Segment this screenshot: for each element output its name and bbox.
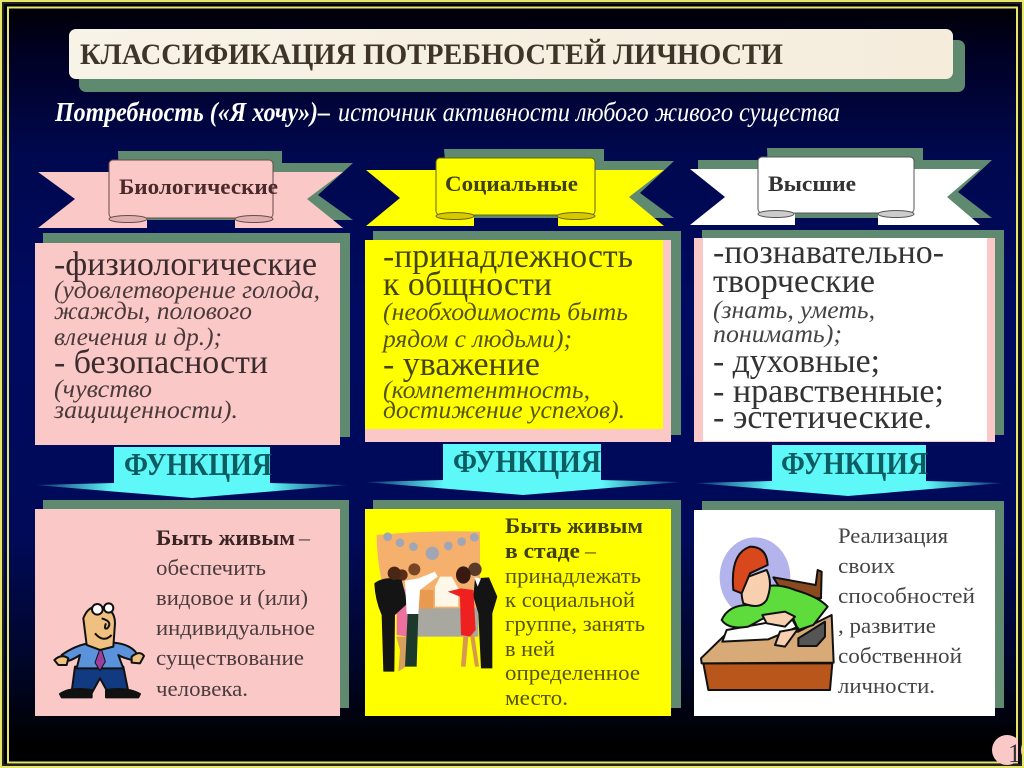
page number badge: 1 — [1008, 739, 1021, 768]
panel: social function — [365, 500, 681, 716]
panel: social function: принадлежать — [505, 563, 641, 588]
panel: higher needs: -познавательно- — [713, 234, 944, 271]
panel: higher needs: творческие — [713, 263, 875, 300]
arrow: function 1: ФУНКЦИЯ — [124, 446, 272, 482]
illustration: student at desk — [701, 537, 834, 690]
panel: biological needs: защищенности). — [53, 397, 238, 424]
panel: social needs: (необходимость быть — [383, 299, 628, 326]
subtitle definition: Потребность («Я хочу»)– — [54, 97, 330, 127]
ribbon: Биологические — [38, 151, 353, 228]
panel: biological needs: -физиологические — [54, 246, 317, 283]
arrow: function 2 — [365, 443, 681, 495]
arrow: function 3 — [695, 445, 1003, 496]
panel: biological function: человека. — [156, 676, 248, 701]
title text: КЛАССИФИКАЦИЯ ПОТРЕБНОСТЕЙ ЛИЧНОСТИ — [80, 38, 783, 71]
arrow: function 1 — [35, 446, 348, 498]
panel: biological needs: (чувство — [54, 376, 152, 403]
panel: social function: – — [584, 538, 597, 563]
page number badge — [992, 735, 1022, 768]
panel: higher function: , развитие — [838, 613, 936, 638]
panel: social function: место. — [505, 685, 568, 710]
panel: social needs: - уважение — [383, 346, 540, 383]
subtitle definition — [54, 97, 840, 127]
panel: social needs: -принадлежность — [383, 238, 633, 275]
panel: biological function: обеспечить — [156, 555, 266, 580]
panel: biological function: видовое и (или) — [156, 585, 308, 610]
panel: social needs: достижение успехов). — [383, 397, 625, 424]
panel: higher needs — [694, 230, 1004, 442]
panel: social function: в стаде — [505, 538, 580, 563]
panel: higher function: способностей — [838, 583, 975, 608]
panel: biological function: существование — [156, 645, 304, 670]
panel: higher needs: понимать); — [713, 321, 842, 348]
panel: social needs: к общности — [383, 266, 552, 303]
ribbon: Социальные — [366, 149, 674, 226]
panel: higher needs: - эстетические. — [713, 399, 932, 436]
panel: biological needs — [35, 233, 350, 445]
panel: social function: группе, занять — [505, 611, 645, 636]
panel: biological needs: - безопасности — [54, 344, 268, 381]
ribbon label: Социальные — [445, 171, 578, 196]
panel: higher function: личности. — [838, 673, 935, 698]
panel: higher function — [694, 501, 1004, 716]
panel: social function: в ней — [505, 636, 555, 661]
panel: social needs: (компетентность, — [383, 377, 590, 404]
panel: social function: Быть живым — [505, 513, 643, 538]
panel: social function: определенное — [505, 660, 640, 685]
title banner — [69, 29, 965, 92]
panel: higher needs: - духовные; — [713, 343, 880, 380]
ribbon: Высшие — [690, 148, 992, 225]
panel: biological needs: влечения и др.); — [54, 324, 222, 351]
right frame edge over badge — [1018, 8, 1021, 762]
subtitle definition: источник активности любого живого существа — [338, 97, 840, 127]
ribbon label: Биологические — [119, 174, 278, 199]
panel: biological function: – — [298, 525, 311, 550]
panel: biological needs: жажды, полового — [54, 298, 252, 325]
panel: social function: к социальной — [505, 587, 635, 612]
panel: biological function: Быть живым — [156, 525, 295, 550]
panel: biological needs: (удовлетворение голода, — [54, 277, 320, 304]
panel: biological function — [35, 500, 349, 716]
ribbon label: Высшие — [768, 171, 856, 196]
panel: higher function: своих — [838, 553, 895, 578]
panel: biological function: индивидуальное — [156, 615, 315, 640]
icon: cartoon man — [54, 603, 144, 697]
panel: higher needs: (знать, уметь, — [713, 297, 875, 324]
illustration: party group — [374, 531, 497, 672]
panel: higher needs: - нравственные; — [713, 373, 944, 410]
arrow: function 3: ФУНКЦИЯ — [781, 445, 928, 481]
panel: social needs — [365, 231, 681, 442]
panel: higher function: собственной — [838, 643, 962, 668]
panel: higher function: Реализация — [838, 523, 948, 548]
panel: social needs: рядом с людьми); — [381, 326, 572, 353]
arrow: function 2: ФУНКЦИЯ — [453, 443, 601, 479]
